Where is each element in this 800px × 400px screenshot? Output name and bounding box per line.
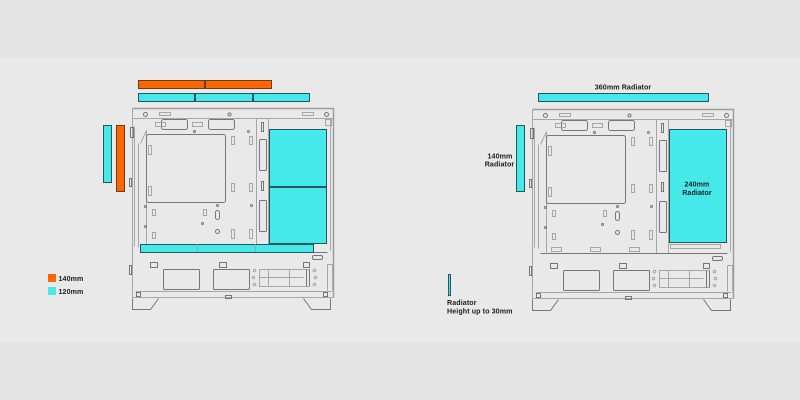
legend [48, 274, 83, 296]
top 140mm radiators [138, 80, 272, 88]
360mm radiator: 360mm Radiator [595, 84, 651, 92]
right case line drawing [530, 110, 734, 310]
140mm radiator: Radiator [485, 160, 514, 168]
bottom 120mm radiators [140, 244, 314, 252]
360mm radiator [538, 84, 708, 102]
rear 140mm radiator [116, 126, 124, 192]
240mm radiator: 240mm [685, 180, 709, 188]
radiator height note: Height up to 30mm [447, 308, 513, 316]
rear 120mm radiator [104, 126, 112, 182]
top 120mm radiators [138, 94, 310, 102]
radiator height note [447, 274, 513, 316]
central background band [0, 57, 800, 343]
legend: 140mm: 140mm [58, 275, 83, 283]
front 120mm radiators [270, 130, 326, 244]
240mm radiator [670, 130, 726, 242]
140mm radiator [485, 126, 524, 192]
radiator height note: Radiator [447, 299, 477, 307]
240mm radiator: Radiator [682, 189, 712, 197]
140mm radiator: 140mm [488, 152, 512, 160]
left case line drawing [130, 108, 334, 310]
legend: 120mm: 120mm [58, 288, 83, 296]
